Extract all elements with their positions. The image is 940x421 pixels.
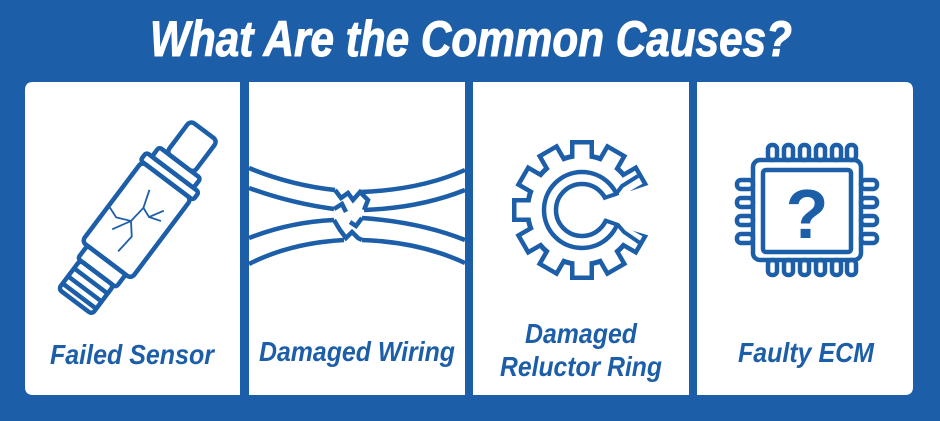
panel: faulty ecm xyxy=(697,82,913,395)
panel: failed sensor xyxy=(25,82,240,395)
label: damaged reluctor ring: Damaged xyxy=(525,318,638,349)
icon: broken gear xyxy=(512,140,657,280)
icon: cracked sensor xyxy=(49,111,230,322)
label: failed sensor: Failed Sensor xyxy=(50,339,216,370)
label: faulty ecm: Faulty ECM xyxy=(738,337,875,368)
panel: damaged wiring xyxy=(249,82,465,395)
panel: faulty ecm: ? xyxy=(786,175,828,253)
label: damaged wiring: Damaged Wiring xyxy=(259,336,455,367)
icon: broken wires xyxy=(249,168,465,264)
panel: damaged reluctor ring: Reluctor Ring xyxy=(500,351,662,382)
title: What Are the Common Causes? xyxy=(150,11,792,67)
icon: chip with question mark xyxy=(737,145,877,275)
panel: damaged reluctor ring xyxy=(473,82,689,395)
